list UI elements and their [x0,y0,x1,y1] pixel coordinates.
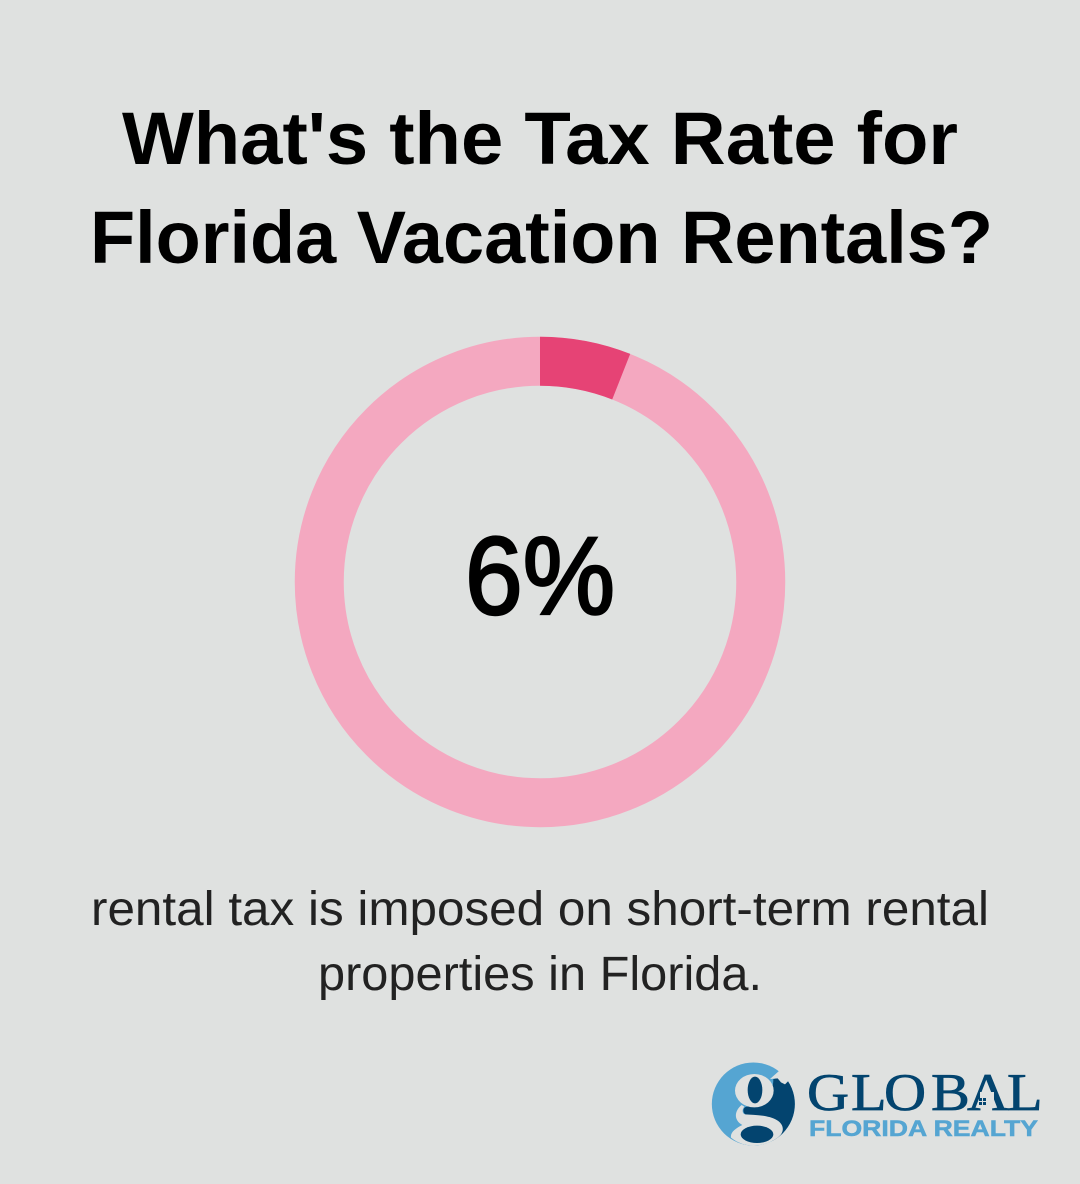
logo emblem [712,1062,795,1146]
logo wordmark: GLOBAL [807,1063,1043,1122]
description text: rental tax is imposed on short-term rental [91,883,989,936]
logo tagline: FLORIDA REALTY [809,1116,1038,1141]
title [90,97,993,279]
title: What's the Tax Rate for [122,97,958,180]
center value: 6% [465,515,615,638]
infographic canvas [94,110,1040,1146]
logo: Global Florida Realty [712,1062,1043,1148]
title: Florida Vacation Rentals? [90,196,993,279]
description text [91,883,989,1001]
description text: properties in Florida. [318,948,762,1001]
donut chart: 6% [319,361,761,803]
